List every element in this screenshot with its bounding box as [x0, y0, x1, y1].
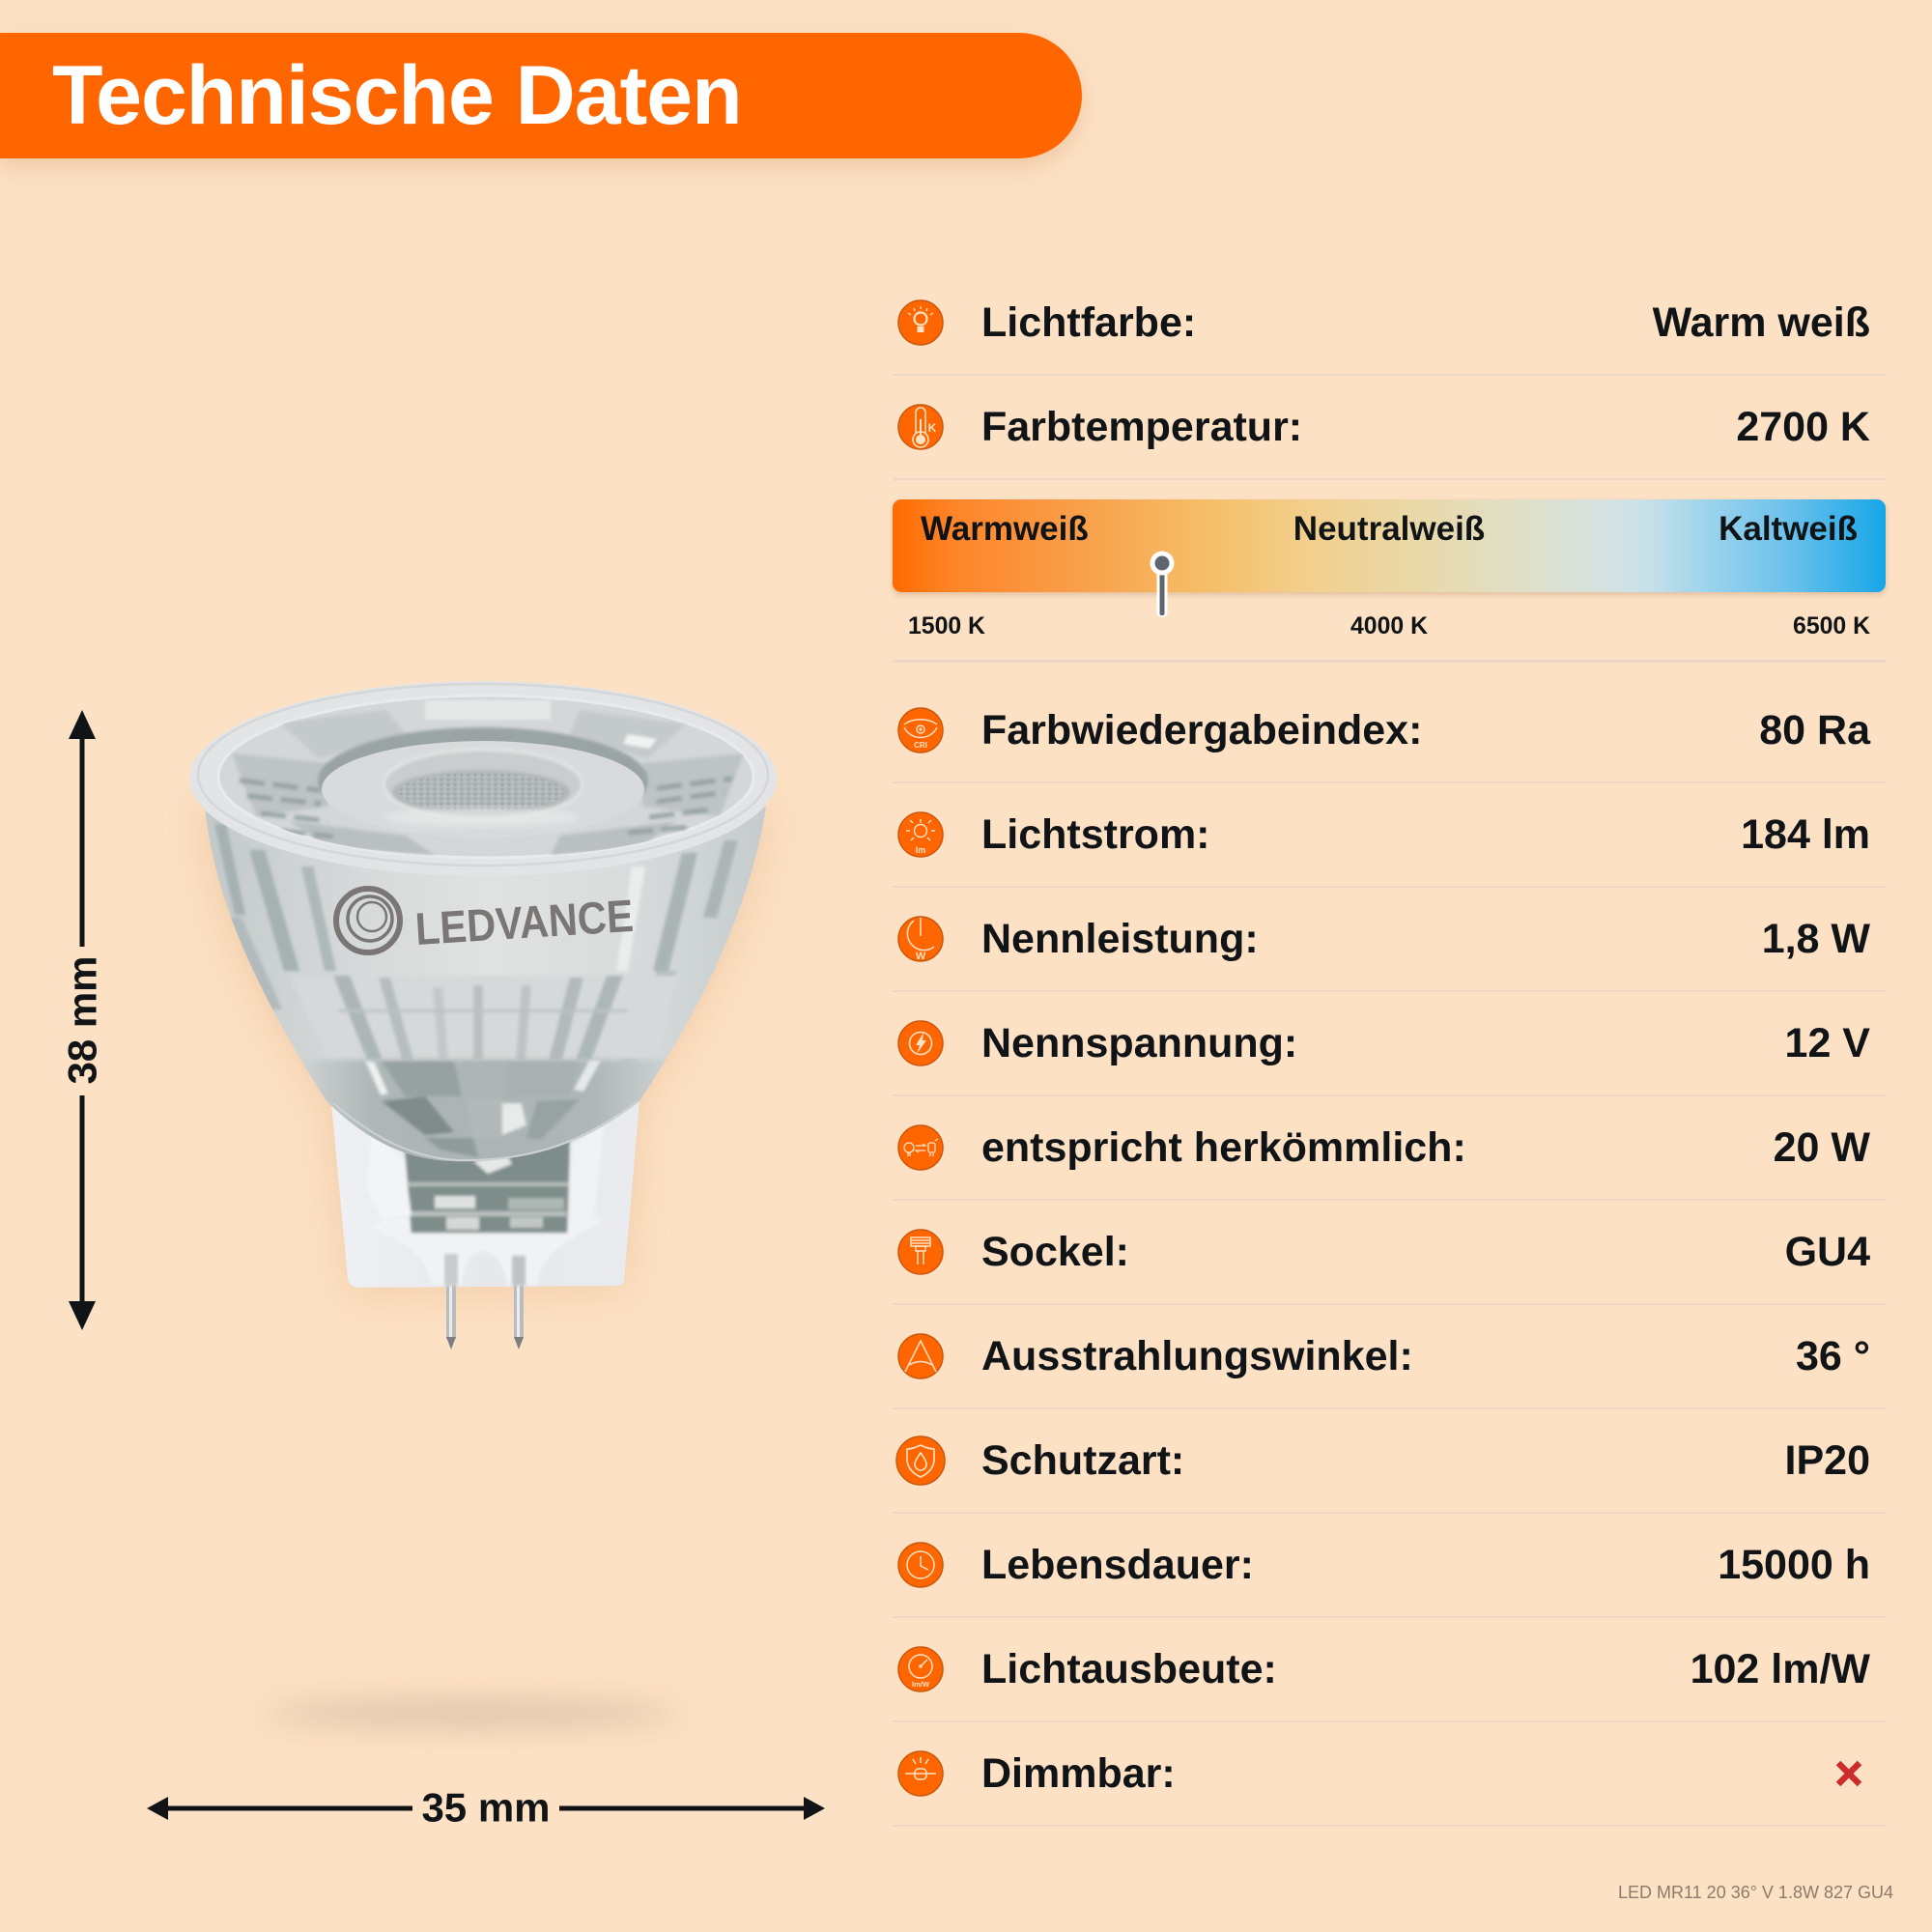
icon: sun lumen: lm: [916, 845, 925, 855]
value: 12 V: [1785, 1020, 1870, 1066]
icon: beam angle: [897, 1333, 944, 1379]
icon: shield with water drop: [895, 1435, 946, 1486]
value: 2700 K: [1736, 404, 1870, 450]
icon: clock: [897, 1542, 944, 1588]
spec row: Farbtemperatur: [893, 375, 1886, 479]
logo: [336, 889, 635, 954]
value: 1,8 W: [1762, 916, 1870, 962]
value: not dimmable cross: [1835, 1760, 1862, 1787]
scale value 4000 K: 4000 K: [1350, 613, 1428, 639]
icon: power W: [897, 916, 944, 962]
spec row: Farbwiedergabeindex: [893, 678, 1886, 782]
spec row: Lichtfarbe: [893, 270, 1886, 375]
label: Lebensdauer:: [981, 1542, 1254, 1588]
scale label neutral: Neutralweiß: [1293, 510, 1485, 548]
spec row: Nennleistung: [893, 887, 1886, 991]
value: 36 °: [1796, 1333, 1870, 1379]
ground shadow: [264, 1703, 679, 1724]
bulb: [184, 681, 792, 1350]
value: 102 lm/W: [1690, 1646, 1870, 1692]
label: Sockel:: [981, 1229, 1129, 1275]
pins: [372, 1217, 604, 1350]
width label: 35 mm: [421, 1785, 551, 1830]
value: IP20: [1785, 1437, 1870, 1484]
icon: socket: [897, 1229, 944, 1275]
icon: dimmer: [897, 1750, 944, 1797]
gradient bar: [893, 499, 1886, 592]
value: 184 lm: [1741, 811, 1870, 858]
spec row: entspricht herkömmlich: [893, 1095, 1886, 1200]
icon: gauge lm/W: [897, 1646, 944, 1692]
brand wordmark: LEDVANCE: [413, 890, 635, 954]
label: Nennleistung:: [981, 916, 1259, 962]
value: 15000 h: [1718, 1542, 1870, 1588]
spec row: Schutzart: [893, 1408, 1886, 1513]
scale value 6500 K: 6500 K: [1793, 613, 1870, 639]
rim and lens: [189, 681, 777, 876]
height dimension arrow: [60, 710, 104, 1330]
icon: bulb comparison: [897, 1124, 944, 1171]
glass reflector body: [205, 807, 766, 1161]
base: [331, 1101, 639, 1288]
label: Dimmbar:: [981, 1750, 1176, 1797]
label: Nennspannung:: [981, 1020, 1297, 1066]
label: entspricht herkömmlich:: [981, 1124, 1466, 1171]
color temperature scale: [891, 499, 1888, 617]
value: GU4: [1785, 1229, 1870, 1275]
icon: sun lumen: [897, 811, 944, 858]
label: Schutzart:: [981, 1437, 1184, 1484]
title: Technische Daten: [52, 49, 742, 142]
spec row: Lichtstrom: [893, 782, 1886, 887]
height label: 38 mm: [60, 955, 104, 1085]
spec row: Lebensdauer: [893, 1513, 1886, 1617]
marker at 2700 K: [1150, 551, 1175, 617]
icon: thermometer: [897, 404, 944, 450]
label: Lichtstrom:: [981, 811, 1209, 858]
label: Lichtausbeute:: [981, 1646, 1277, 1692]
icon: power W: W: [916, 951, 926, 962]
value: Warm weiß: [1653, 299, 1870, 346]
value: 80 Ra: [1759, 707, 1870, 753]
scale label warm: Warmweiß: [921, 510, 1089, 548]
spec row: Lichtausbeute: [893, 1617, 1886, 1721]
scale value 1500 K: 1500 K: [908, 613, 985, 639]
product illustration: LED bulb with dimensions: [60, 681, 825, 1830]
value: 20 W: [1774, 1124, 1870, 1171]
spec row: Sockel: [893, 1200, 1886, 1304]
scale label cold: Kaltweiß: [1719, 510, 1858, 548]
icon: eye CRI: [897, 707, 944, 753]
icon: light bulb: [897, 299, 944, 346]
socket window: [367, 1125, 604, 1233]
label: Farbtemperatur:: [981, 404, 1302, 450]
label: Farbwiedergabeindex:: [981, 707, 1422, 753]
spec row: Ausstrahlungswinkel: [893, 1304, 1886, 1408]
icon: gauge lm/W: lm/W: [912, 1680, 930, 1689]
label: Ausstrahlungswinkel:: [981, 1333, 1413, 1379]
footer product name: LED MR11 20 36° V 1.8W 827 GU4: [1618, 1883, 1893, 1902]
title banner: [0, 33, 1082, 158]
icon: eye CRI: CRI: [914, 741, 927, 750]
spec row: Nennspannung: [893, 991, 1886, 1095]
icon: lightning: [897, 1020, 944, 1066]
label: Lichtfarbe:: [981, 299, 1196, 346]
icon: thermometer: K: [928, 421, 937, 435]
spec row: Dimmbar: [893, 1721, 1886, 1826]
width dimension arrow: [147, 1785, 825, 1830]
